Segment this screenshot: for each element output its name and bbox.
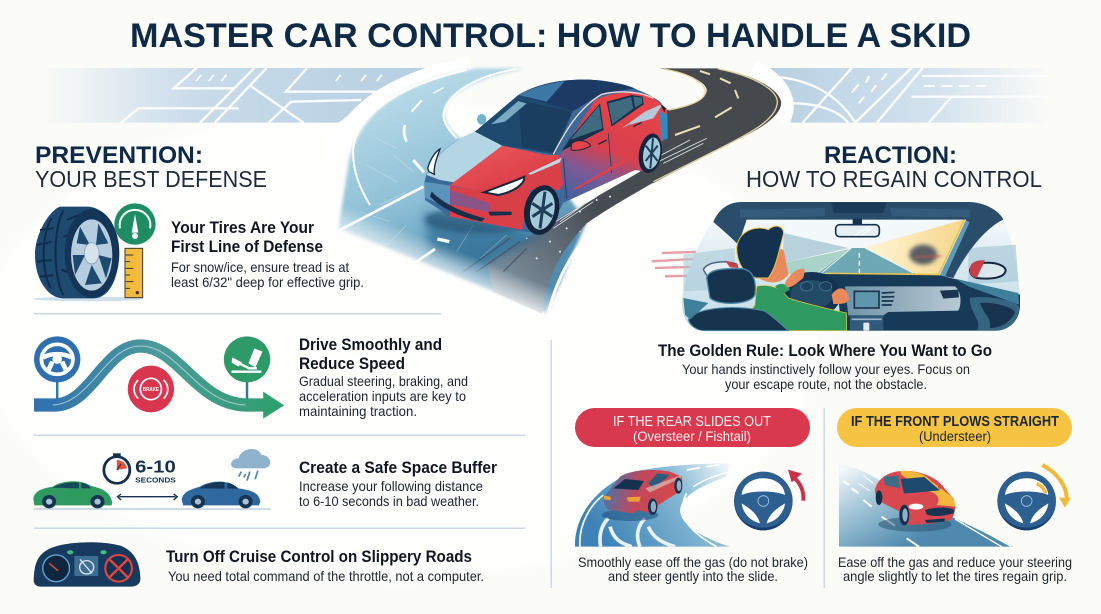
illustration: understeer road, car and steering wheel — [839, 463, 1071, 547]
tip: drive smoothly — [299, 335, 468, 419]
title: MASTER CAR CONTROL: HOW TO HANDLE A SKID — [130, 17, 971, 55]
tip: drive smoothly: Reduce Speed — [299, 354, 405, 373]
left section heading: YOUR BEST DEFENSE — [35, 166, 267, 192]
icon: dashboard with cruise control off — [34, 542, 140, 587]
tip: cruise control: Turn Off Cruise Control on Slippery Roads — [166, 547, 472, 566]
rain cloud — [231, 449, 270, 481]
icon: smooth driving ribbon with wheel, brake and pedal: BRAKE — [143, 387, 159, 393]
decorative road map band right — [761, 68, 1048, 123]
asphalt edge lines — [653, 69, 777, 182]
seconds label — [135, 457, 176, 484]
banner: understeer: (Understeer) — [919, 429, 991, 444]
tip: safe space buffer: Increase your following distance — [299, 478, 483, 494]
tip: cruise control — [166, 547, 484, 584]
driver — [758, 249, 788, 282]
tip: drive smoothly: acceleration inputs are key to — [299, 388, 466, 404]
windshield view — [747, 220, 965, 274]
banner: understeer: IF THE FRONT PLOWS STRAIGHT — [851, 414, 1059, 430]
text: oversteer action: and steer gently into the slide. — [608, 568, 778, 584]
red sedan rear view — [602, 470, 682, 521]
stopwatch — [104, 453, 130, 483]
tip: tires: First Line of Defense — [171, 237, 323, 256]
tip: safe space buffer: Create a Safe Space Buffer — [299, 458, 497, 477]
right section heading: HOW TO REGAIN CONTROL — [746, 166, 1042, 192]
seat — [707, 269, 755, 303]
banner: oversteer: (Oversteer / Fishtail) — [633, 429, 751, 444]
banner: oversteer — [575, 408, 810, 447]
text: understeer action: Ease off the gas and reduce your steering — [838, 554, 1072, 570]
icon: tire and tread gauge — [33, 203, 156, 301]
tip: drive smoothly: maintaining traction. — [299, 403, 417, 419]
illustration: driver looking through windshield — [652, 202, 1020, 331]
dashboard — [822, 274, 1020, 331]
roof, pillars — [713, 202, 1003, 278]
golden rule: Your hands instinctively follow your eyes. Focus on — [682, 361, 970, 377]
seconds label: 6-10 — [135, 457, 176, 477]
left section heading — [35, 142, 267, 192]
tip: drive smoothly: Drive Smoothly and — [299, 335, 442, 354]
banner: understeer — [837, 408, 1072, 447]
golden rule: The Golden Rule: Look Where You Want to Go — [658, 341, 992, 360]
hero illustration: icy and asphalt road — [333, 65, 785, 313]
tip: tires: least 6/32" deep for effective grip. — [171, 274, 364, 290]
golden rule: your escape route, not the obstacle. — [725, 376, 927, 392]
left section heading: PREVENTION: — [35, 142, 203, 169]
illustration: oversteer road, car and steering wheel — [575, 463, 803, 547]
blue car — [182, 482, 260, 508]
icon: smooth driving ribbon with wheel, brake and pedal — [34, 336, 284, 419]
tip: drive smoothly: Gradual steering, braking, and — [299, 373, 468, 389]
golden rule — [658, 341, 992, 392]
red hatchback front view — [875, 471, 955, 532]
decorative road map band left — [42, 68, 432, 123]
tip: tires: Your Tires Are Your — [171, 218, 314, 237]
side mirror — [970, 263, 1006, 279]
text: oversteer action — [578, 554, 808, 584]
hero car — [424, 80, 668, 238]
tip: safe space buffer: to 6-10 seconds in bad weather. — [299, 493, 479, 509]
tip: tires: For snow/ice, ensure tread is at — [171, 259, 349, 275]
tip: tires — [171, 218, 364, 290]
green car — [33, 481, 112, 508]
right section heading — [746, 142, 1042, 192]
tip: cruise control: You need total command of the throttle, not a computer. — [168, 568, 484, 584]
text: understeer action — [838, 554, 1072, 584]
text: oversteer action: Smoothly ease off the gas (do not brake) — [578, 554, 808, 570]
seconds label: SECONDS — [135, 475, 176, 484]
steering wheel — [782, 272, 841, 317]
text: understeer action: angle slightly to let the tires regain grip. — [843, 568, 1067, 584]
right section heading: REACTION: — [824, 142, 957, 169]
banner: oversteer: IF THE REAR SLIDES OUT — [613, 414, 771, 430]
distance arrow — [118, 494, 177, 500]
icon: following distance with two cars, stopwatch and rain cloud — [33, 449, 271, 509]
tip: safe space buffer — [299, 458, 497, 509]
road surface — [337, 68, 781, 313]
